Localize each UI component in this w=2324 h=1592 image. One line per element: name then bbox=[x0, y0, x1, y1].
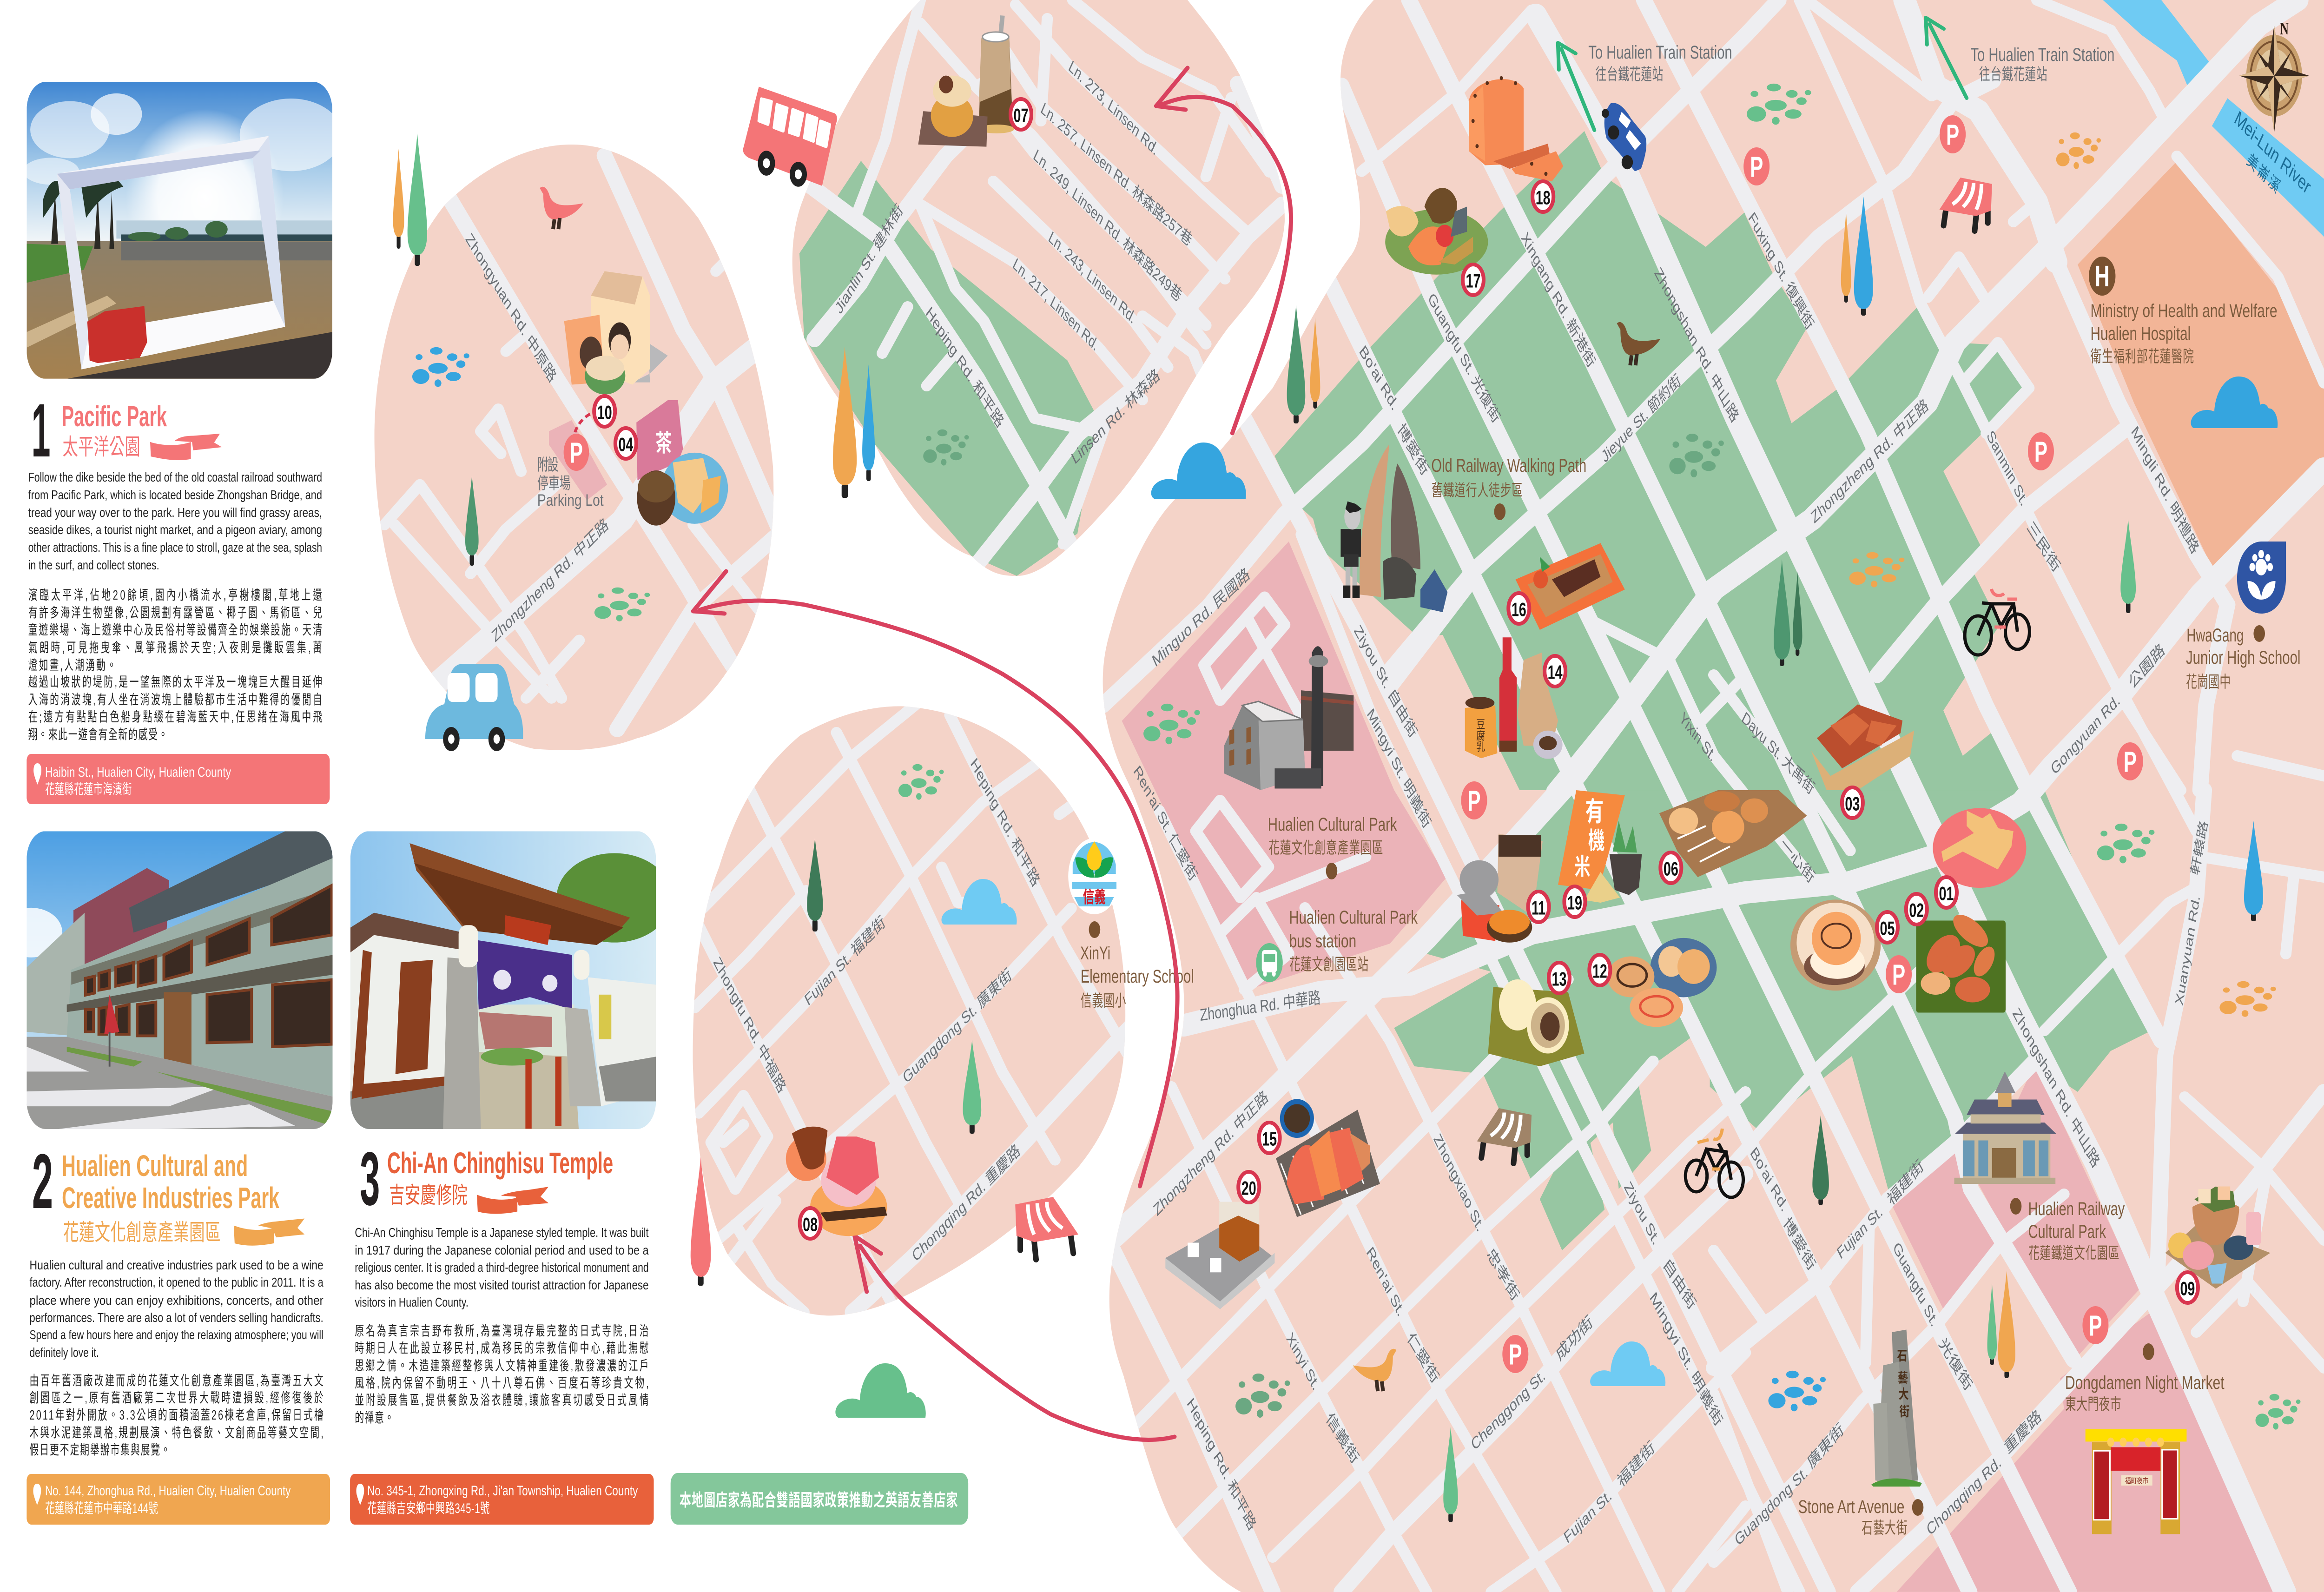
food 18: bread loaf bbox=[1469, 76, 1563, 181]
number 3: 3 bbox=[360, 1136, 380, 1221]
text: Chinese intro: 翔。來此一遊會有全新的感受。 bbox=[28, 727, 168, 742]
numbered shop badges: 02 bbox=[1909, 899, 1924, 921]
numbered shop badges: 08 bbox=[803, 1213, 818, 1235]
numbered shop badges: 10 bbox=[597, 401, 612, 423]
label: XinYi Elementary bbox=[1080, 921, 1194, 1010]
street labels: 自由街 bbox=[1660, 1255, 1698, 1313]
arrow: main map to Zhongfu area bbox=[855, 1236, 1175, 1440]
parking markers: P bbox=[2034, 436, 2047, 468]
parking markers: P bbox=[2089, 1310, 2102, 1342]
food 20: jelly tray bbox=[1165, 1202, 1274, 1309]
logo: HwaGang junior high bbox=[2237, 542, 2286, 614]
street labels: 光復街 bbox=[1936, 1334, 1975, 1394]
parking markers: P bbox=[570, 437, 583, 469]
label: parking lot: Parking Lot bbox=[537, 492, 604, 509]
arrow: green to train station 1 bbox=[1558, 43, 1594, 130]
street labels: Fuxing St. 復興街 bbox=[1746, 209, 1816, 333]
land: green zones bbox=[1274, 131, 2152, 1250]
street labels: 信義街 bbox=[1323, 1409, 1361, 1467]
numbered shop badges: 18 bbox=[1536, 186, 1551, 209]
label: Cultural Park: Hualien Cultural Park bbox=[1268, 814, 1397, 835]
panel: Chi-An Chinghisu Temple bbox=[350, 831, 672, 1525]
street labels: Heping Rd. 和平路 bbox=[968, 754, 1042, 890]
label: train station 1: To Hualien Train Station bbox=[1588, 42, 1732, 63]
text: English intro: seaside dikes, a tourist night market, and a pigeon aviary, among bbox=[28, 522, 322, 537]
title zh: 花蓮文化創意產業園區 bbox=[63, 1220, 221, 1245]
numbered shop badges: 11 bbox=[1532, 897, 1545, 919]
food 06: pastries on board bbox=[1659, 790, 1807, 877]
food 17: seafood plate bbox=[1385, 188, 1488, 275]
street labels: Mingyi St. 明義街 bbox=[1647, 1288, 1725, 1430]
label: bus station bbox=[1256, 907, 1418, 982]
street labels: Zhonghua Rd. 中華路 bbox=[1199, 988, 1321, 1024]
label: train station 2: 往台鐵花蓮站 bbox=[1979, 66, 2047, 84]
numbered shop badges: 19 bbox=[1567, 892, 1582, 914]
land: base peach bbox=[1079, 0, 2324, 1592]
food 01: pastry plate bbox=[1933, 808, 2026, 888]
food 13: buns on leaf bbox=[1488, 979, 1585, 1066]
numbered shop badges: 09 bbox=[2180, 1277, 2195, 1300]
food 15: raw meat on grill bbox=[1276, 1099, 1380, 1217]
text: English intro: Hualien cultural and creative industries park used to be a wine bbox=[29, 1258, 324, 1273]
text: English intro: has also become the most visited tourist attraction for Japanese bbox=[355, 1278, 649, 1293]
vehicle: bicycle lower bbox=[1685, 1129, 1743, 1197]
street labels: Zhongxiao St. bbox=[1431, 1130, 1487, 1235]
street labels: 博愛街 bbox=[1395, 420, 1432, 479]
label: XinYi Elementary: Elementary School bbox=[1081, 966, 1194, 987]
label: Railway Cultural Park: Hualien Railway bbox=[2028, 1199, 2125, 1219]
address bar: No. 345-1, Zhongxing Rd., Ji'an Township, Hualien County bbox=[367, 1483, 638, 1499]
title: Hualien Cultural and Creative Industries Park: Hualien Cultural and bbox=[62, 1149, 248, 1182]
street labels: Ziyou St. bbox=[1622, 1178, 1663, 1248]
label: train station 2: To Hualien Train Station bbox=[1970, 45, 2114, 65]
street labels: Ren'ai St. bbox=[1364, 1243, 1407, 1320]
panel: Hualien Cultural and Creative Industries Park bbox=[0, 831, 333, 1525]
address bar: 花蓮縣花蓮市中華路144號 bbox=[45, 1500, 158, 1516]
text: Chinese intro: 有許多海洋生物塑像,公園規劃有露營區、椰子園、馬術區、兒 bbox=[28, 605, 322, 621]
panel: Pacific Park bbox=[23, 81, 342, 804]
leaf clusters bbox=[412, 84, 2300, 1430]
street labels: Zhongzheng Rd. 中正路 bbox=[1809, 395, 1931, 527]
text: Chinese intro: 創園區之一,原有舊酒廠第二次世界大戰時遭損毀,經修復後於 bbox=[29, 1390, 324, 1406]
birds bbox=[540, 187, 1660, 1391]
street labels: Fujian St. bbox=[1835, 1202, 1885, 1263]
street labels: Jianlin St. 建林街 bbox=[832, 200, 905, 317]
street labels: Bo'ai Rd. bbox=[1748, 1143, 1791, 1215]
label: HwaGang Junior High: HwaGang bbox=[2186, 625, 2244, 646]
label: Stone Art Avenue: Stone Art Avenue bbox=[1798, 1497, 1904, 1517]
label: XinYi Elementary: 信義國小 bbox=[1081, 992, 1126, 1010]
numbered shop badges: 16 bbox=[1512, 598, 1526, 621]
text: Chinese intro: 燈如晝,人潮湧動。 bbox=[28, 658, 116, 673]
food 19: organic rice: 米 bbox=[1574, 854, 1590, 880]
title: Pacific Park: Pacific Park bbox=[61, 401, 167, 433]
numbered shop badges: 15 bbox=[1262, 1128, 1277, 1150]
street labels: 廣東街 bbox=[1805, 1420, 1846, 1473]
text: English intro: from Pacific Park, which is located beside Zhongshan Bridge, and bbox=[28, 488, 322, 502]
label: parking lot: 停車場 bbox=[537, 475, 571, 493]
ribbon bbox=[234, 1218, 304, 1246]
street labels: 成功街 bbox=[1553, 1312, 1595, 1365]
street labels: Chongqing Rd. 重慶路 bbox=[910, 1140, 1023, 1266]
numbered shop badges: 03 bbox=[1845, 793, 1860, 815]
street labels: Ln. 257, Linsen Rd. 林森路257巷 bbox=[1038, 99, 1195, 250]
text: English intro: Follow the dike beside the bed of the old coastal railroad southward bbox=[28, 470, 322, 485]
parking markers: P bbox=[1509, 1339, 1522, 1371]
street labels: Zhongfu Rd. 中福路 bbox=[711, 953, 788, 1097]
parking markers: P bbox=[1892, 959, 1905, 991]
address bar: 花蓮縣花蓮市海濱街 bbox=[45, 781, 132, 797]
label: Railway Cultural Park bbox=[2010, 1198, 2125, 1262]
numbered shop badges: 20 bbox=[1241, 1177, 1256, 1199]
street labels: Guangdong St. 廣東街 bbox=[900, 964, 1014, 1087]
building: Hualien Railway Cultural Park bbox=[1954, 1071, 2056, 1184]
note: English-friendly shops: 本地圖店家為配合雙語國家政策推動之英語友善店家 bbox=[680, 1490, 958, 1510]
benches bbox=[1015, 178, 1992, 1260]
food 19: organic rice: 機 bbox=[1588, 828, 1605, 854]
photo: temple gate bbox=[350, 831, 672, 1131]
label: Dongdamen Night Market: 東大門夜市 bbox=[2065, 1396, 2121, 1414]
street labels: 福建街 bbox=[1885, 1156, 1926, 1209]
sculpture: Old Railway Walking Path figure bbox=[1340, 444, 1447, 612]
label: bus station: bus station bbox=[1289, 931, 1356, 951]
land: cultural park pink bbox=[1122, 542, 1447, 990]
vehicle: light-blue car bbox=[425, 664, 523, 751]
label: Railway Cultural Park: 花蓮鐵道文化園區 bbox=[2028, 1245, 2119, 1262]
land: railway park pink bbox=[1893, 1064, 2140, 1360]
food 14: soy products: 豆 bbox=[1476, 718, 1485, 731]
text: English intro: visitors in Hualien County. bbox=[355, 1295, 469, 1310]
text: English intro: other attractions. This is a fine place to stroll, gaze at the sea, splash bbox=[28, 540, 322, 555]
label: train station 1 bbox=[1588, 42, 1732, 84]
food 05: raccoon cake plate bbox=[1790, 899, 1881, 991]
street labels: 三民街 bbox=[2024, 517, 2063, 576]
ribbon bbox=[150, 434, 222, 460]
street labels: Ln. 217, Linsen Rd. bbox=[1010, 254, 1101, 355]
numbered shop badges: 14 bbox=[1548, 661, 1563, 683]
street labels: Guangfu St. bbox=[1890, 1238, 1941, 1330]
parking markers: P bbox=[1750, 152, 1763, 183]
vehicle: bus bbox=[743, 87, 837, 187]
label: bus station: 花蓮文創園區站 bbox=[1289, 956, 1368, 974]
street labels: Heping Rd. 和平路 bbox=[1184, 1394, 1259, 1534]
map blob: main Hualien city map bbox=[1079, 0, 2324, 1592]
title zh: 太平洋公園 bbox=[63, 434, 140, 460]
food 08: strawberry tart bbox=[786, 1127, 887, 1236]
numbered shop badges: 13 bbox=[1552, 968, 1566, 990]
label: Dongdamen Night Market: Dongdamen Night Market bbox=[2065, 1373, 2225, 1393]
roads: city grid bbox=[1103, 0, 2324, 1592]
street labels: Ln. 249, Linsen Rd. 林森路249巷 bbox=[1031, 145, 1184, 305]
dashed link from parking to shop 10 bbox=[575, 413, 594, 432]
landmark: compass rose: N bbox=[2280, 19, 2289, 39]
logo: XinYi elementary: 信義 bbox=[1083, 887, 1106, 906]
monument: Stone Art Avenue: 街 bbox=[1899, 1405, 1909, 1419]
street labels: Zhongzheng Rd. 中正路 bbox=[489, 515, 611, 646]
photo: cultural park buildings bbox=[0, 831, 333, 1131]
note: English-friendly shops bbox=[671, 1473, 968, 1525]
label: Dongdamen Night Market bbox=[2065, 1343, 2225, 1414]
street labels: 福建街 bbox=[1615, 1437, 1657, 1491]
text: Chinese intro: 在;遠方有點點白色船身點綴在碧海藍天中,任思緒在海風中飛 bbox=[28, 709, 322, 725]
text: English intro bbox=[28, 470, 322, 573]
text: Chinese intro: 由百年舊酒廠改建而成的花蓮文化創意產業園區,為臺灣五大文 bbox=[29, 1373, 324, 1388]
street labels: Ln. 243, Linsen Rd. bbox=[1046, 227, 1139, 328]
street labels: 忠孝街 bbox=[1484, 1244, 1522, 1305]
text: Chinese intro: 思鄉之情。木造建築經整修與人文精神重建後,散發濃濃的江戶 bbox=[355, 1358, 649, 1374]
map blob: Zhongfu Rd area bbox=[667, 674, 1152, 1348]
food 04: tea bag and sweets: 茶 bbox=[655, 430, 672, 457]
street labels: Xinyi St. bbox=[1284, 1329, 1322, 1394]
label: Cultural Park bbox=[1268, 814, 1397, 879]
food 19: organic rice: 有 bbox=[1585, 796, 1604, 827]
street labels: 重慶路 bbox=[2002, 1406, 2044, 1457]
text: English intro: definitely love it. bbox=[29, 1345, 99, 1360]
monument: Stone Art Avenue: 大 bbox=[1899, 1387, 1909, 1402]
text: Chinese intro: 童遊樂場、海上遊樂中心及民俗村等設備齊全的娛樂設施。天清 bbox=[28, 622, 322, 638]
river: Mei-Lun bbox=[2103, 0, 2324, 237]
address bar: No. 144, Zhonghua Rd., Hualien City, Hualien County bbox=[45, 1483, 291, 1499]
street labels: Xingang Rd. 新港街 bbox=[1519, 229, 1598, 371]
address bar: Haibin St., Hualien City, Hualien County bbox=[45, 765, 231, 780]
text: English intro: Chi-An Chinghisu Temple is a Japanese styled temple. It was built bbox=[355, 1225, 649, 1240]
text: Chinese intro: 的禪意。 bbox=[355, 1410, 394, 1426]
place labels bbox=[537, 42, 2314, 1537]
street labels: Chenggong St. bbox=[1469, 1366, 1548, 1454]
street labels: Mingyi St. 明義街 bbox=[1364, 705, 1433, 832]
text: Chinese intro: 越過山坡狀的堤防,是一望無際的太平洋及一塊塊巨大醒目延伸 bbox=[28, 674, 322, 690]
street labels: Zhongshan Rd. 中山路 bbox=[2010, 1004, 2102, 1171]
text: English intro bbox=[355, 1225, 649, 1310]
food 14: soy products: 乳 bbox=[1476, 740, 1485, 753]
food 14: soy products bbox=[1465, 637, 1563, 759]
street labels: Mingli Rd. 明禮路 bbox=[2128, 423, 2201, 557]
food 02: pastries on leaf bbox=[1916, 908, 2006, 1012]
label: train station 1: 往台鐵花蓮站 bbox=[1595, 66, 1663, 84]
land: hospital bbox=[2078, 161, 2324, 580]
clouds bbox=[835, 377, 2278, 1418]
arrow: green to train station 2 bbox=[1926, 18, 1967, 98]
photo: Pacific Park frame bbox=[23, 81, 342, 379]
land: night market pink bbox=[1897, 1312, 2286, 1592]
numbered shop badges bbox=[594, 99, 2198, 1303]
food 16: grilled meat tray bbox=[1516, 543, 1625, 630]
text: English intro: in 1917 during the Japanese colonial period and used to be a bbox=[355, 1243, 649, 1258]
text: English intro: Spend a few hours here and enjoy the relaxing atmosphere; you will bbox=[29, 1328, 324, 1342]
label: Mei-Lun River: 美崙溪 bbox=[2244, 150, 2283, 197]
text: English intro bbox=[29, 1258, 324, 1360]
food 14: soy products: 腐 bbox=[1476, 729, 1485, 742]
number 1: 1 bbox=[32, 388, 51, 473]
street labels: Fujian St. bbox=[1561, 1486, 1614, 1547]
text: English intro: tread your way over to the park. Here you will find grassy areas, bbox=[28, 505, 322, 520]
text: English intro: religious center. It is graded a third-degree historical monument and bbox=[355, 1260, 649, 1275]
street labels: 軒轅路 bbox=[2188, 819, 2210, 877]
title: Hualien Cultural and Creative Industries Park bbox=[62, 1149, 279, 1215]
gate: Dongdamen night market bbox=[2086, 1429, 2186, 1534]
trees bbox=[393, 133, 2263, 1522]
text: English intro: performances. There are also a lot of venders selling handicrafts. bbox=[29, 1310, 324, 1325]
street labels: Bo'ai Rd. bbox=[1357, 342, 1401, 414]
numbered shop badges: 06 bbox=[1664, 858, 1678, 880]
arrow: main map to Pacific Park area bbox=[693, 571, 1177, 1186]
label: HwaGang Junior High: 花崗國中 bbox=[2186, 674, 2231, 691]
label: hospital: Ministry of Health and Welfare bbox=[2090, 301, 2278, 321]
street labels bbox=[463, 57, 2210, 1550]
vehicle: blue car bbox=[1602, 103, 1646, 172]
street labels: Ziyou St. 自由街 bbox=[1352, 621, 1419, 741]
building: Hualien Cultural Park factory bbox=[1224, 646, 1353, 790]
label: Stone Art Avenue: 石藝大街 bbox=[1862, 1519, 1908, 1537]
label: hospital bbox=[2089, 257, 2278, 366]
street labels: Sanmin St. bbox=[1984, 427, 2030, 509]
numbered shop badges: 17 bbox=[1466, 270, 1480, 292]
text: Chinese intro: 2011年對外開放。3.3公頃的面積涵蓋26棟老倉庫,保留日式檜 bbox=[29, 1407, 324, 1423]
street labels: 博愛街 bbox=[1781, 1213, 1818, 1275]
map blob: Linsen Rd area bbox=[762, 0, 1301, 604]
ribbon bbox=[477, 1187, 548, 1214]
food 09: picnic set bbox=[2165, 1186, 2270, 1288]
street labels: Guangdong St. bbox=[1732, 1462, 1810, 1550]
label: Railway Cultural Park: Cultural Park bbox=[2028, 1222, 2106, 1242]
food 04: tea bag and sweets bbox=[636, 400, 728, 526]
food 12: sweet rolls bbox=[1607, 938, 1717, 1027]
text: Chinese intro: 入海的消波塊,有人坐在消波塊上體驗都市生活中難得的優閒自 bbox=[28, 692, 322, 707]
label: bus station: Hualien Cultural Park bbox=[1289, 907, 1418, 928]
address bar bbox=[26, 1474, 330, 1525]
street labels: Zhongshan Rd. 中山路 bbox=[1652, 264, 1741, 426]
label: train station 2 bbox=[1970, 45, 2114, 84]
text: Chinese intro: 時期日人在此設立移民村,成為移民的宗教信仰中心,藉此撫慰 bbox=[355, 1341, 649, 1356]
food 11: preserved jar bbox=[1457, 834, 1543, 943]
logo: XinYi elementary bbox=[1068, 838, 1120, 914]
food 03: fried chicken box bbox=[1811, 704, 1914, 790]
address bar: 花蓮縣吉安鄉中興路345-1號 bbox=[367, 1500, 490, 1516]
numbered shop badges: 05 bbox=[1880, 917, 1895, 939]
text: Chinese intro: 氣朗時,可見拖曳傘、風箏飛揚於天空;入夜則是攤販雲集,萬 bbox=[28, 640, 322, 655]
label: hospital: 衛生福利部花蓮醫院 bbox=[2090, 348, 2194, 366]
label: parking lot bbox=[537, 456, 604, 509]
street labels: Gongyuan Rd. bbox=[2048, 690, 2122, 779]
arrow: main map to Linsen area bbox=[1156, 68, 1291, 433]
numbered shop badges: 12 bbox=[1592, 960, 1607, 982]
text: Chinese intro: 濱臨太平洋,佔地20餘頃,園內小橋流水,亭榭樓閣,草地上還 bbox=[28, 588, 322, 603]
label: Old Railway Walking Path bbox=[1431, 456, 1586, 520]
street labels: Chongqing Rd. bbox=[1924, 1452, 2003, 1539]
street labels: Linsen Rd. 林森路 bbox=[1069, 365, 1162, 468]
street labels: Ln. 273, Linsen Rd. bbox=[1066, 57, 1161, 159]
street labels: Jieyue St. 節約街 bbox=[1599, 370, 1683, 466]
street labels: Fujian St. 福建街 bbox=[802, 912, 887, 1010]
text: English intro: in the surf, and collect stones. bbox=[28, 558, 159, 573]
street labels: Zhongzheng Rd. 中正路 bbox=[1151, 1087, 1270, 1220]
parking markers: P bbox=[2124, 746, 2137, 778]
street labels: Heping Rd. 和平路 bbox=[923, 303, 1006, 431]
label: Mei-Lun River: Mei-Lun River bbox=[2232, 106, 2314, 198]
text: Chinese intro bbox=[29, 1373, 324, 1458]
monument: Stone Art Avenue bbox=[1871, 1329, 1922, 1486]
street labels: Minguo Rd. 民國路 bbox=[1150, 564, 1252, 671]
label: HwaGang Junior High: Junior High School bbox=[2186, 647, 2300, 668]
street labels: Xuanyuan Rd. bbox=[2172, 893, 2203, 1007]
numbered shop badges: 04 bbox=[618, 433, 633, 456]
title: Chi-An Chinghisu Temple: Chi-An Chinghisu Temple bbox=[387, 1146, 613, 1180]
text: Chinese intro: 原名為真言宗吉野布教所,為臺灣現存最完整的日式寺院,日治 bbox=[355, 1323, 649, 1339]
text: English intro: place where you can enjoy exhibitions, concerts, and other bbox=[29, 1293, 324, 1308]
vehicle: bicycle upper bbox=[1965, 589, 2029, 655]
text: Chinese intro bbox=[28, 588, 322, 742]
street labels: Zhongyuan Rd. 中原路 bbox=[463, 229, 559, 386]
parking markers bbox=[564, 115, 2143, 1373]
label: hospital: H bbox=[2095, 259, 2110, 293]
numbered shop badges: 07 bbox=[1014, 104, 1028, 126]
food 07: cake and drink bbox=[918, 15, 1014, 147]
gate: Dongdamen night market: 福町夜市 bbox=[2125, 1477, 2148, 1486]
monument: Stone Art Avenue: 藝 bbox=[1898, 1371, 1908, 1386]
address bar bbox=[350, 1474, 654, 1525]
title: Hualien Cultural and Creative Industries Park: Creative Industries Park bbox=[62, 1181, 279, 1215]
label: hospital: Hualien Hospital bbox=[2090, 324, 2191, 344]
title zh: 吉安慶修院 bbox=[389, 1182, 468, 1208]
label: Stone Art Avenue bbox=[1798, 1497, 1923, 1537]
street labels: 公園路 bbox=[2126, 640, 2167, 693]
text: Chinese intro bbox=[355, 1323, 649, 1426]
address bar bbox=[26, 754, 330, 804]
street labels: Ren'ai St. 仁愛街 bbox=[1131, 762, 1200, 885]
label: XinYi Elementary: XinYi bbox=[1080, 943, 1110, 964]
label: Old Railway Walking Path: 舊鐵道行人徒步區 bbox=[1432, 482, 1523, 500]
label: HwaGang Junior High bbox=[2186, 625, 2300, 691]
landmark: compass rose bbox=[2239, 19, 2309, 132]
text: Chinese intro: 並附設展售區,提供餐飲及浴衣體驗,讓旅客真切感受日式風情 bbox=[355, 1393, 649, 1408]
text: Chinese intro: 木與水泥建築風格,規劃展演、特色餐飲、文創商品等藝文空間, bbox=[29, 1425, 324, 1440]
number 2: 2 bbox=[32, 1139, 53, 1225]
label: parking lot: 附設 bbox=[537, 456, 559, 474]
food 19: organic rice bbox=[1558, 790, 1642, 903]
street labels: Dayu St. 大禹街 bbox=[1739, 708, 1817, 798]
text: Chinese intro: 假日更不定期舉辦市集與展覽。 bbox=[29, 1442, 170, 1458]
parking markers: P bbox=[1467, 786, 1481, 817]
numbered shop badges: 01 bbox=[1939, 882, 1954, 905]
label: Old Railway Walking Path: Old Railway Walking Path bbox=[1431, 456, 1586, 476]
street labels: 一心街 bbox=[1778, 834, 1817, 887]
label: Cultural Park: 花蓮文化創意產業園區 bbox=[1268, 839, 1383, 857]
food 10: packaged snacks bbox=[564, 271, 668, 395]
monument: Stone Art Avenue: 石 bbox=[1897, 1349, 1907, 1363]
street labels: Yixin St. bbox=[1677, 708, 1719, 765]
text: Chinese intro: 風格,院內保留不動明王、八十八尊石佛、百度石等珍貴文物, bbox=[355, 1375, 649, 1391]
street labels: Guangfu St. 光復街 bbox=[1426, 289, 1503, 427]
text: English intro: factory. After reconstruction, it opened to the public in 2011. It is a bbox=[29, 1275, 324, 1290]
parking markers: P bbox=[1946, 119, 1959, 151]
street labels: 仁愛街 bbox=[1405, 1328, 1441, 1387]
map blob: Pacific Park area bbox=[349, 111, 805, 778]
